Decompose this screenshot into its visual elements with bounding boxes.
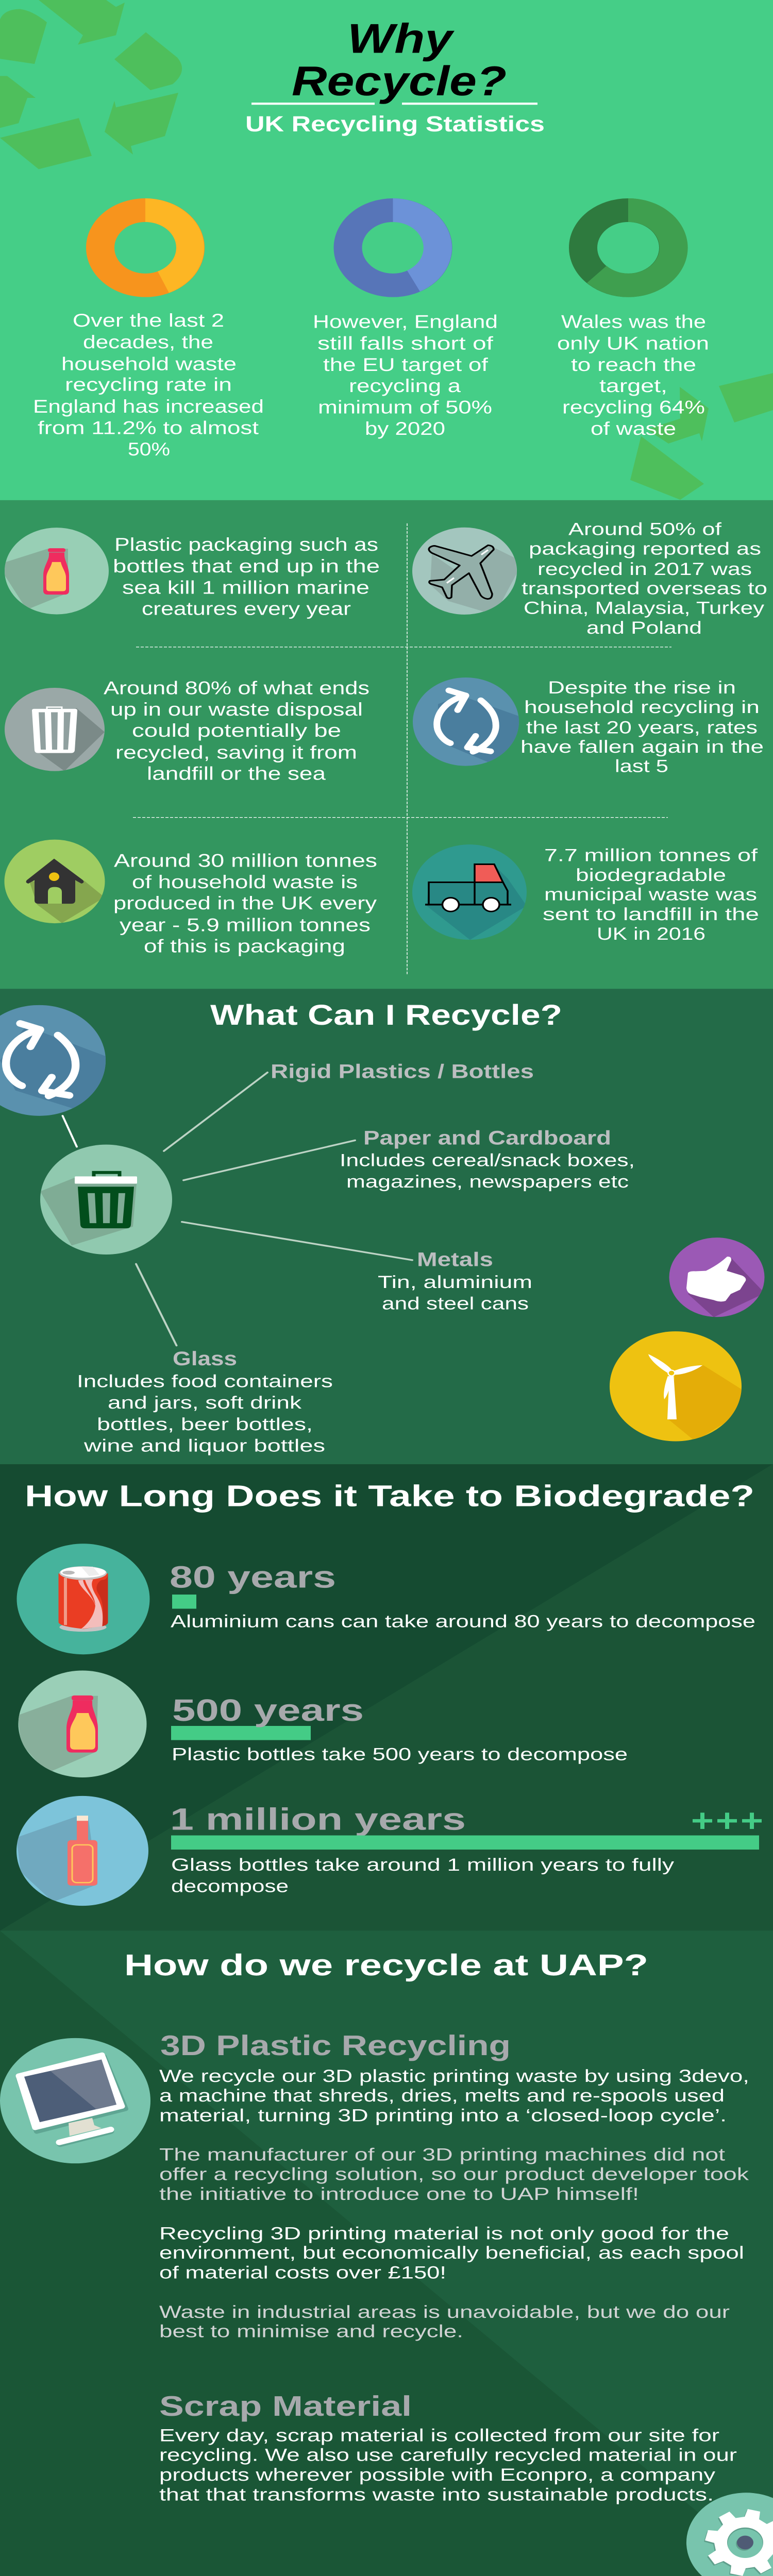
icon: recycling arrows large [0,1005,106,1116]
text block: 3devo: We recycle our 3D plastic printing waste by using 3devo, [159,2066,749,2086]
text: England rate: from 11.2% to almost [38,418,259,438]
text: landfill [543,845,759,944]
icon: plastic bottle [5,528,109,614]
text: EU target: However, England [313,312,498,332]
label: glass: bottles, beer bottles, [97,1414,313,1434]
chart: Wales donut [583,198,688,297]
text: falling rates: the last 20 years, rates [526,717,758,737]
icon: thumbs up [669,1238,765,1317]
icon: gear [686,2493,773,2576]
text: waste disposal: up in our waste disposal [110,700,363,720]
text: England rate: recycling rate in [65,375,232,395]
text: Wales [557,312,709,439]
text: packaging overseas: and Poland [586,618,702,638]
connector lines [63,1073,412,1346]
text block: economic benefit: Recycling 3D printing material is not only good for the [159,2224,729,2243]
plus signs [693,1812,762,1829]
text: waste disposal: recycled, saving it from [115,742,357,763]
text block: manufacturer: The manufacturer of our 3D printing machines did not [159,2144,726,2164]
text: EU target: recycling a [349,376,461,396]
label: metals: Tin, aluminium [378,1272,532,1292]
text: landfill: biodegradable [576,865,726,885]
panel: facts [0,500,773,989]
text: household waste: of this is packaging [144,936,345,957]
text: plastic packaging: sea kill 1 million marine [122,578,369,598]
subheading: scrap material: Scrap Material [159,2390,412,2422]
text block: economic benefit [159,2224,744,2282]
label: glass [77,1347,333,1455]
heading: What Can I Recycle? [210,999,562,1031]
panel: how do we recycle at UAP [0,1931,773,2576]
text: waste disposal: Around 80% of what ends [104,678,369,699]
text: Wales: of waste [591,418,676,439]
icon: recycling arrows [413,677,519,766]
label: paper and cardboard [340,1127,635,1191]
text: plastic packaging: Plastic packaging such as [114,535,378,555]
text block: scrap material [159,2426,737,2504]
icon: house [4,840,105,923]
text: EU target: still falls short of [317,333,494,354]
text: EU target [313,312,498,439]
text: falling rates: household recycling in [524,697,760,717]
icon: wind turbine [610,1331,742,1442]
text: falling rates: Despite the rise in [548,677,736,697]
title: Why [347,15,455,62]
icon: truck [412,844,527,940]
icon: green bin [40,1145,172,1255]
icon: white bin [5,688,105,771]
text: packaging overseas: Around 50% of [568,519,722,539]
label: paper and cardboard: magazines, newspapers etc [346,1172,629,1191]
icon: plastic bottle [18,1670,146,1777]
label: rigid plastics: Rigid Plastics / Bottles [271,1060,534,1082]
text block: 3devo [159,2066,749,2125]
text: landfill: municipal waste was [544,885,757,904]
text: Wales: to reach the [571,354,696,375]
text: plastic packaging: creatures every year [142,599,351,619]
label: metals [378,1248,532,1313]
text block: waste in industrial areas: Waste in industrial areas is unavoidable, but we do our [159,2302,730,2322]
heading: How Long Does it Take to Biodegrade? [25,1479,754,1513]
text: household waste: of household waste is [132,872,358,892]
stat: 1 million years: 1 million years [170,1802,466,1837]
text: EU target: minimum of 50% [318,397,492,418]
stat: 1 million years [170,1802,762,1896]
text: Wales: Wales was the [561,312,706,332]
text block: manufacturer [159,2144,749,2204]
text: England rate: Over the last 2 [73,310,224,331]
divider lines [133,523,671,975]
text block: manufacturer: offer a recycling solution, so our product developer took [159,2164,749,2184]
text block: scrap material: recycling. We also use carefully recycled material in our [159,2445,737,2465]
text block: scrap material: products wherever possible with Econpro, a company [159,2465,716,2484]
panel: biodegrade [0,1464,773,1931]
subheading: 3D plastic recycling: 3D Plastic Recycling [160,2029,511,2061]
label: glass: Glass [173,1347,237,1369]
text: packaging overseas: China, Malaysia, Turkey [524,598,765,618]
stat: 80 years: 80 years [170,1560,336,1595]
text block: 3devo: material, turning 3D printing into a ‘closed-loop cycle’. [159,2106,727,2125]
text: packaging overseas: packaging reported as [529,539,761,558]
text: waste disposal: could potentially be [132,720,341,741]
text: packaging overseas: transported overseas to [522,578,767,598]
stat: 80 years: Aluminium cans can take around 80 years to decompose [171,1612,755,1631]
panel: what can I recycle [0,989,773,1464]
label: glass: and jars, soft drink [108,1393,302,1413]
text block: economic benefit: of material costs over £150! [159,2263,446,2282]
text: waste disposal: landfill or the sea [147,764,326,784]
title: Recycle? [292,58,507,104]
stat: 500 years: Plastic bottles take 500 years to decompose [172,1744,628,1764]
stat: 500 years [171,1693,628,1764]
label: glass: wine and liquor bottles [83,1436,325,1455]
label: metals: and steel cans [382,1294,529,1313]
text block: waste in industrial areas [159,2302,730,2341]
text block: manufacturer: the initiative to introduce one to UAP himself! [159,2184,639,2204]
text: EU target: the EU target of [323,354,489,375]
bar: 1 million years [171,1835,759,1850]
text: falling rates [520,677,764,776]
text: Wales: recycling 64% [562,397,705,418]
label: paper and cardboard: Includes cereal/snack boxes, [340,1150,635,1170]
bar: 500 years [171,1726,311,1740]
text: England rate [33,310,264,460]
heading: How do we recycle at UAP? [124,1948,648,1982]
text: England rate: decades, the [83,332,213,352]
text: landfill: 7.7 million tonnes of [544,845,758,865]
icon: glass bottle [16,1796,148,1906]
text block: waste in industrial areas: best to minimise and recycle. [159,2321,463,2341]
stat: 1 million years: Glass bottles take around 1 million years to fully [171,1855,675,1874]
chart: England recycling rate donut [100,198,204,293]
text: England rate: household waste [61,354,237,375]
stat: 500 years: 500 years [172,1693,364,1727]
text: plastic packaging: bottles that end up in the [113,556,380,577]
text: Wales: target, [599,376,667,396]
text: England rate: England has increased [33,396,264,417]
label: metals: Metals [417,1248,493,1270]
text: falling rates: last 5 [615,756,668,776]
text block: scrap material: Every day, scrap material is collected from our site for [159,2426,719,2445]
icon: plane [412,528,517,615]
label: glass: Includes food containers [77,1371,333,1391]
text: falling rates: have fallen again in the [520,737,764,756]
text: household waste: Around 30 million tonnes [114,851,377,871]
text: waste disposal [104,678,369,784]
background recycling arrows top left [0,0,182,169]
text block: economic benefit: environment, but economically beneficial, as each spool [159,2243,744,2263]
title [251,15,537,105]
text block: 3devo: a machine that shreds, dries, melts and re-spools used [159,2086,725,2106]
text: packaging overseas [522,519,767,638]
text: landfill: sent to landfill in the [543,904,759,924]
text: England rate: 50% [128,439,170,460]
text: household waste: produced in the UK every [113,893,377,913]
chart: EU target donut [348,198,452,292]
text: EU target: by 2020 [365,418,445,439]
label: paper and cardboard: Paper and Cardboard [363,1127,611,1149]
icon: drink can [16,1544,149,1654]
stat: 80 years [170,1560,755,1631]
text: packaging overseas: recycled in 2017 was [537,559,752,579]
subtitle: UK Recycling Statistics [245,112,545,136]
icon: monitor [0,2038,150,2163]
bar: 80 years [172,1595,196,1608]
text block: scrap material: that that transforms waste into sustainable products. [159,2484,714,2504]
stat: 1 million years: decompose [171,1876,289,1896]
text: household waste [113,851,377,957]
panel: why recycle [0,0,773,500]
text: landfill: UK in 2016 [597,924,705,944]
text: household waste: year - 5.9 million tonnes [120,915,371,936]
text: plastic packaging [113,535,380,619]
background recycling arrows bottom right [630,373,773,500]
text: Wales: only UK nation [557,333,709,354]
